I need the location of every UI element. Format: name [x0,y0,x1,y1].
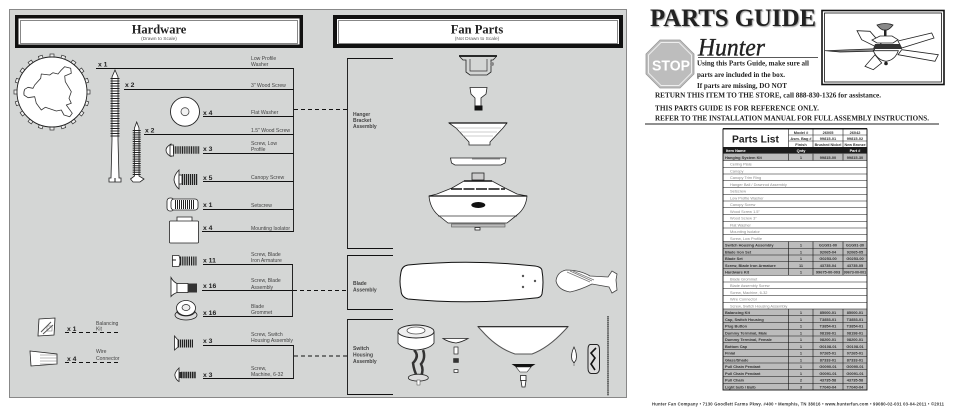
text block: instructions: parts are included in the box. [697,71,785,79]
table row labels: Low Profile Washer [730,196,764,200]
icon: glass shade [478,327,568,354]
table header rows: Brushed Nickel [815,143,841,147]
table quantities and part numbers: 87333-01 [847,358,864,362]
icon: hanger bracket [459,56,497,75]
heading: Hardware: (Drawn to Scale) [141,36,177,42]
part names: Balancing [96,321,119,327]
assembly labels: Blade [353,281,367,287]
assembly labels: Assembly [353,359,377,365]
table quantities and part numbers: 92065-04 [820,250,837,254]
icon: low profile washer [14,54,90,130]
heading: Fan Parts [333,15,623,48]
table row labels: Blade Set [725,256,743,261]
icon: blade assembly screw [171,278,197,296]
part names: Housing Assembly [251,338,293,344]
table row labels: Wire Connector [730,296,758,302]
part names: Kit [96,326,103,332]
table row labels: Pull Chain [725,378,745,382]
table quantities and part numbers: G0253-00 [819,256,837,261]
table grid lines [723,154,867,390]
table quantities and part numbers: 1 [800,350,803,356]
table quantities and part numbers: 1 [800,330,803,336]
part names: Machine, 6-32 [251,372,283,378]
quantity labels: x 1 [67,326,77,333]
title: PARTS GUIDE [650,3,816,32]
table row labels: Dummy Terminal, Female [725,337,773,342]
table row labels: Wood Screw 3" [730,216,757,220]
part names: Screw, Blade [251,278,281,284]
table quantities and part numbers: 11 [799,263,804,268]
table quantities and part numbers: 85000-01 [847,310,864,315]
icon: motor housing [429,173,527,230]
icon: pull chain pendant [572,347,576,366]
table row labels: Canopy Trim Ring [730,175,761,180]
table quantities and part numbers: 07265-01 [820,350,837,356]
icon: switch housing [398,325,434,385]
table header rows: Finish [795,142,807,147]
table row labels: Blade Iron Set [725,250,752,254]
part names: Iron Armature [251,258,282,264]
table quantities and part numbers: 99673-00-001 [844,270,866,274]
icon: canopy screw [174,170,198,189]
table row labels: Setscrew [730,188,746,194]
part names: Connector [96,356,120,362]
icon: pull chain [607,316,609,396]
assembly labels: Assembly [353,288,377,294]
icon: blade iron [556,270,617,293]
icon: stop sign [646,40,694,88]
table quantities and part numbers: 1 [800,364,803,369]
leader lines: hardware [65,68,347,378]
part names: Low Profile [251,56,276,62]
assembly labels: Switch [353,346,369,352]
table: parts list [723,129,867,390]
icon: hanger ball [470,88,487,110]
table quantities and part numbers: 1 [800,358,803,362]
table quantities and part numbers: 43735-58 [847,378,864,382]
icon: cap and plug parts [443,338,468,372]
table quantities and part numbers: T3854-01 [820,324,837,328]
table row labels: Screw, Switch Housing Assembly [730,304,787,308]
table quantities and part numbers: 1 [800,256,803,261]
table quantities and part numbers: 08198-01 [847,330,864,336]
table row labels: Hanger Ball / Downrod Assembly [730,182,787,187]
table header rows: Item Name [726,148,747,153]
table row labels: Pull Chain Pendant [725,364,761,369]
table row labels: Blade Assembly Screw [730,283,770,288]
table quantities and part numbers: 1 [800,344,803,349]
quantity labels: x 3 [203,338,213,345]
table quantities and part numbers: 43735-05 [847,263,864,268]
icon: fan blade [400,262,543,302]
part names: Canopy Screw [251,175,284,181]
part names: Washer [251,62,269,68]
table header rows: Part # [850,148,861,153]
quantity labels: x 1 [98,62,108,68]
rules [645,124,939,128]
table row labels: Switch Housing Assembly [725,242,774,248]
icon: low profile screw [166,144,200,156]
part names: Blade [251,304,264,310]
table row labels [725,155,787,390]
table grey rows fills [723,154,867,390]
table row labels: Screw, Machine, 6-32 [730,290,767,295]
table quantities and part numbers: 08200-01 [820,337,837,342]
table quantities and part numbers: 43735-04 [820,263,837,268]
table row labels: Balancing Kit [725,310,751,315]
table quantities and part numbers: 1 [800,310,803,315]
table row labels: Canopy [730,168,743,174]
part names: Screw, [251,366,266,372]
text block: instructions: If parts are missing, DO NOT [697,82,787,90]
table quantities and part numbers: 08198-01 [820,330,837,336]
table row labels: Finial [725,350,735,356]
quantity labels: x 2 [125,82,135,89]
table quantities and part numbers: 87333-01 [820,358,837,362]
heading: Hardware [15,15,303,48]
table row labels: Glass/Shade [725,358,749,362]
icon: blade iron screw [172,256,196,266]
quantity labels: x 16 [203,283,216,290]
part names: 3" Wood Screw [251,83,286,89]
icon: finial [512,364,536,387]
table quantities and part numbers: 07265-01 [847,350,864,356]
icon: machine screw [175,368,196,382]
table row labels: Plug Button [725,324,748,328]
table row labels: Hanging System Kit [725,155,762,160]
table quantities and part numbers: 3 [800,384,803,390]
table quantities and part numbers: T3854-01 [847,324,864,328]
assembly labels: Housing [353,352,373,358]
assembly brackets [348,58,393,394]
heading: Hardware: Hardware [132,22,187,36]
quantity labels: x 4 [203,110,213,117]
part names: Screw, Blade [251,252,281,258]
table quantities and part numbers: G0108-01 [846,344,864,349]
icon: balancing kit [38,318,55,336]
table header rows: New Bronze [844,143,866,147]
text block: instructions: THIS PARTS GUIDE IS FOR REFERENCE ONLY. [655,104,819,112]
part names: Mounting Isolator [251,226,290,232]
quantity labels: x 4 [67,356,77,363]
text block: instructions: RETURN THIS ITEM TO THE STORE, call 888-830-1326 for assistance. [655,92,881,100]
table quantities and part numbers: 99675-00-003 [816,270,841,274]
part names: Setscrew [251,203,272,209]
heading: Parts List: Parts List [732,134,780,146]
table quantities and part numbers: G1G91-30 [846,242,864,248]
table quantities and part numbers: 08200-01 [847,337,864,342]
table quantities and part numbers: T3853-01 [847,317,864,322]
table row labels: Blade Grommet [730,276,758,282]
part names: Flat Washer [251,110,279,116]
table row labels: Bottom Cap [725,344,748,349]
table row labels: Flat Washer [730,222,752,228]
table header rows: 26042 [850,130,861,135]
panel: background [10,10,626,398]
icon: flat washer [170,97,200,126]
assembly labels: Bracket [353,118,372,124]
table quantities and part numbers: G0091-01 [846,371,864,376]
table quantities and part numbers: G0253-00 [846,256,864,261]
table row labels: Ceiling Plate [730,162,752,166]
table quantities and part numbers: G0091-01 [819,371,837,376]
assembly labels [353,112,377,365]
table quantities and part numbers: 1 [800,317,803,322]
icon: 3 inch wood screw [109,70,121,182]
icon: stop sign: STOP [652,58,690,74]
part names: Profile [251,147,266,153]
table row labels: Pull Chain Pendant [725,371,761,376]
table header rows: 99815-02 [847,136,864,141]
part names [96,56,293,378]
table quantities and part numbers: 1 [800,371,803,376]
table quantities and part numbers: G0108-01 [819,344,837,349]
table header rows: Asm. Bag # [790,136,812,141]
table quantities and part numbers: 1 [800,324,803,328]
logo: Hunter: Hunter [697,34,765,62]
quantity labels: x 2 [145,128,155,134]
table quantities and part numbers: 43735-58 [820,378,837,382]
quantity labels: x 5 [203,175,213,182]
table header rows: 99815-01 [820,136,837,141]
part names: Assembly [251,285,274,291]
table row labels: Screw, Blade Iron Armature [725,263,777,268]
table row labels: Mounting Isolator [730,229,761,234]
icon: switch housing screw [174,336,193,350]
icon: canopy [449,123,507,145]
table header rows: 26005 [823,130,834,135]
heading: Fan Parts: Fan Parts [451,22,503,36]
quantity labels: x 4 [203,225,213,232]
table quantities and part numbers: 2 [800,378,803,382]
table quantities and part numbers: G0090-01 [846,364,864,369]
assembly labels: Hanger [353,112,370,118]
icon: 1.5 inch wood screw [130,122,144,182]
icon: setscrew [167,198,198,211]
part names: Screw, Low [251,141,277,147]
icon: hunter pendant [588,344,600,374]
heading: Fan Parts: (Not Drawn to Scale) [455,36,500,42]
text block: instructions [655,60,929,122]
icon: canopy trim ring [450,158,506,165]
table quantities and part numbers: 1 [800,337,803,342]
table quantities and part numbers: 1 [800,242,803,248]
table quantities and part numbers: T7040-04 [847,384,864,390]
quantity labels: x 11 [203,258,216,264]
table quantities and part numbers: G0090-01 [819,364,837,369]
part names: Grommet [251,310,273,316]
table row labels: Light bulb / Bulb [725,384,756,390]
table quantities and part numbers: 92065-05 [847,250,864,254]
quantity labels: x 3 [203,146,213,153]
icon: blade grommet [175,300,197,320]
quantity labels [67,62,216,379]
table quantities and part numbers: 99815-00 [820,155,836,160]
text block: instructions: Using this Parts Guide, make sure all [697,60,809,68]
table quantities and part numbers: T7040-04 [820,384,837,390]
footer: Hunter Fan Company • 7130 Goodlett Farms Pkwy. #400 • Memphis, TN 38016 • www.hunterfan.com • 99080-02-031 03-04-2011 • ©2011 [652,402,945,406]
text block: instructions: REFER TO THE INSTALLATION MANUAL FOR FULL ASSEMBLY INSTRUCTIONS. [655,114,929,122]
part names: Screw, Switch [251,332,283,338]
table header rows [723,129,867,154]
icon: mounting isolator [170,217,198,243]
table quantities and part numbers: 1 [800,270,803,274]
table row labels: Wood Screw 1.5" [730,209,760,214]
table quantities and part numbers: T3853-01 [820,317,837,322]
table quantities and part numbers: 85000-01 [820,310,837,315]
table row labels: Canopy Screw [730,202,755,207]
table quantities and part numbers: 99815-30 [847,155,863,160]
quantity labels: x 16 [203,310,216,317]
table row labels: Screw, Low Profile [730,236,762,241]
illustration: ceiling fan [822,10,944,84]
part names: Wire [96,349,107,355]
table header rows: Model # [794,130,809,135]
rule under logo [698,56,818,58]
table row labels: Dummy Terminal, Male [725,330,768,336]
table header rows: Qnty [797,148,806,153]
table quantities and part numbers [799,155,866,390]
table outline [723,129,867,390]
icon: wire connector [30,351,57,366]
quantity labels: x 1 [203,202,213,209]
assembly labels: Assembly [353,124,377,130]
table quantities and part numbers: 1 [800,155,803,160]
table row labels: Hardware Kit [725,270,750,274]
table row labels: Cap, Switch Housing [725,317,764,322]
quantity labels: x 3 [203,372,213,379]
part names: 1.5" Wood Screw [251,128,290,134]
table quantities and part numbers: G1G91-00 [819,242,837,248]
table quantities and part numbers: 1 [800,250,803,254]
